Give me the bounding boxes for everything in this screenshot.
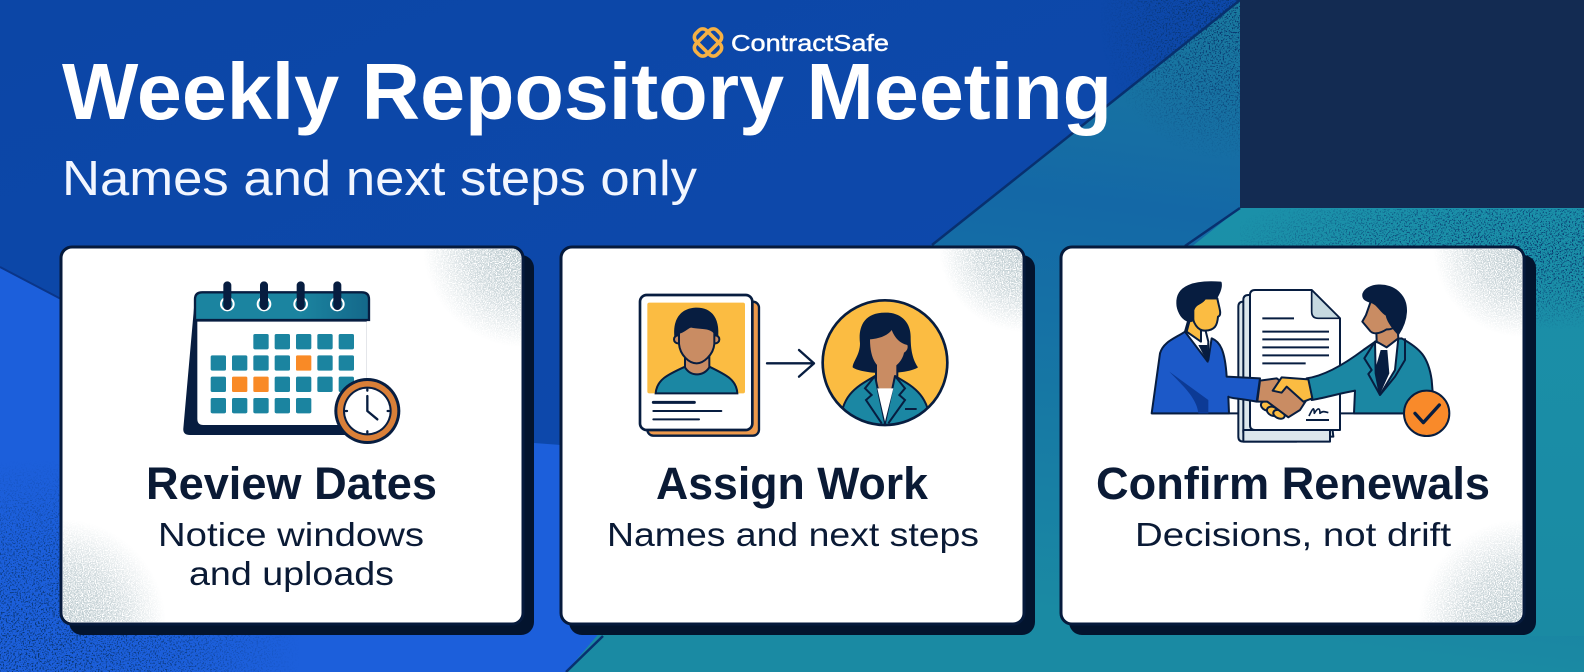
title: Weekly Repository Meeting bbox=[62, 47, 1112, 136]
subtitle: Names and next steps only bbox=[62, 152, 698, 206]
text: notice windows and uploads bbox=[158, 516, 424, 592]
heading: review dates: Review Dates bbox=[146, 458, 437, 509]
text: decisions, not drift: Decisions, not drift bbox=[1135, 516, 1451, 553]
heading: assign work: Assign Work bbox=[656, 458, 929, 509]
assignee avatar bbox=[823, 300, 947, 428]
handshake bbox=[1257, 377, 1312, 420]
ground line bbox=[1152, 410, 1413, 416]
icon: handshake over contract bbox=[1152, 282, 1449, 442]
text: notice windows and uploads: and uploads bbox=[189, 555, 394, 592]
text: notice windows and uploads: Notice windows bbox=[158, 516, 424, 553]
right person bbox=[1307, 286, 1434, 413]
logo: ContractSafe bbox=[692, 27, 889, 58]
logo: ContractSafe: ContractSafe bbox=[731, 30, 889, 56]
arrow bbox=[767, 350, 814, 377]
profile card bbox=[640, 295, 759, 436]
icon: calendar with clock bbox=[183, 285, 400, 444]
icon: interlocked rings bbox=[692, 27, 724, 58]
left person bbox=[1152, 282, 1260, 413]
panel: confirm renewals bbox=[1061, 247, 1536, 635]
heading: confirm renewals: Confirm Renewals bbox=[1096, 458, 1490, 509]
panel: review dates bbox=[61, 247, 534, 635]
icon: orange check badge bbox=[1404, 391, 1449, 436]
icon: profile card to assignee bbox=[640, 295, 947, 436]
panel: assign work bbox=[561, 247, 1035, 635]
contract stack bbox=[1238, 290, 1340, 442]
text: names and next steps: Names and next steps bbox=[607, 516, 979, 553]
